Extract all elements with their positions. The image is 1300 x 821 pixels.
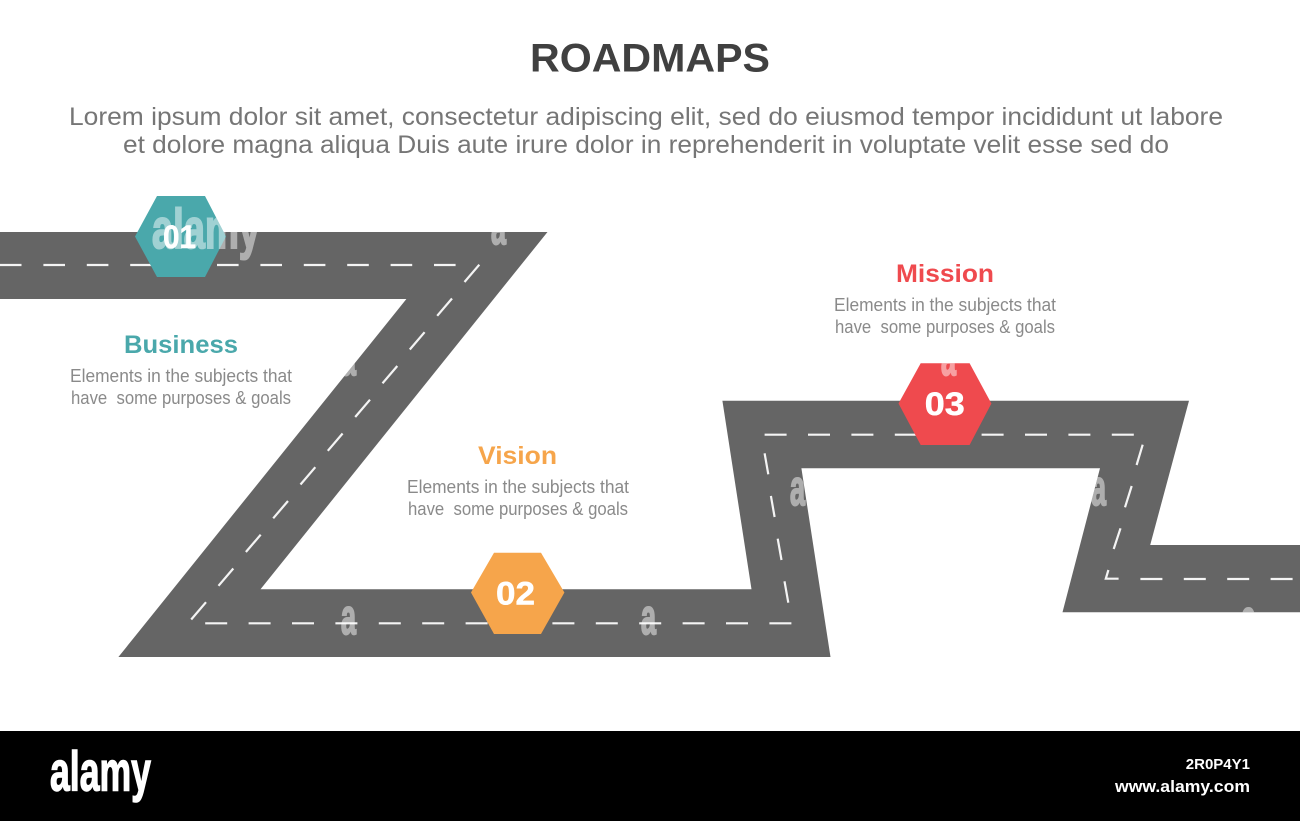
intro text: Lorem ipsum dolor sit amet, consectetur adipiscing elit, sed do eiusmod tempor incididunt ut labore	[69, 103, 1223, 131]
road centre dashes	[0, 265, 1293, 623]
text block: Business: have some purposes & goals	[71, 388, 291, 408]
image id: 2R0P4Y1	[1186, 756, 1250, 773]
marker 02	[471, 553, 564, 634]
text block: Mission: have some purposes & goals	[835, 317, 1055, 337]
text block: Business	[70, 331, 292, 408]
text block: Vision: Vision	[478, 442, 557, 470]
marker 01	[135, 196, 226, 277]
watermark: a	[1241, 590, 1257, 646]
intro text	[69, 103, 1223, 159]
watermark: a	[1091, 460, 1107, 516]
text block: Mission: Elements in the subjects that	[834, 295, 1056, 315]
watermark: a	[341, 589, 357, 645]
marker 03	[898, 363, 991, 445]
marker 02: 02	[496, 575, 535, 611]
text block: Mission: Mission	[896, 260, 994, 288]
marker 03: 03	[925, 386, 965, 422]
text block: Business: Business	[124, 331, 238, 359]
title: ROADMAPS	[530, 37, 770, 81]
intro text: et dolore magna aliqua Duis aute irure dolor in reprehenderit in voluptate velit esse sed do	[123, 131, 1169, 159]
text block: Business: Elements in the subjects that	[70, 366, 292, 386]
text block: Vision: have some purposes & goals	[408, 499, 628, 519]
text block: Vision	[407, 442, 629, 519]
text block: Mission	[834, 260, 1056, 337]
watermark: a	[491, 199, 507, 255]
watermark: a	[790, 460, 806, 516]
footer bar	[0, 731, 1300, 821]
watermark	[152, 197, 1257, 646]
text block: Vision: Elements in the subjects that	[407, 477, 629, 497]
watermark: a	[941, 330, 957, 386]
footer logo: alamy	[50, 740, 151, 803]
website: www.alamy.com	[1114, 777, 1250, 796]
watermark: a	[641, 589, 657, 645]
marker 01: 01	[163, 219, 196, 255]
watermark: a	[341, 330, 357, 386]
road	[0, 232, 1300, 657]
watermark: alamy	[152, 197, 260, 260]
